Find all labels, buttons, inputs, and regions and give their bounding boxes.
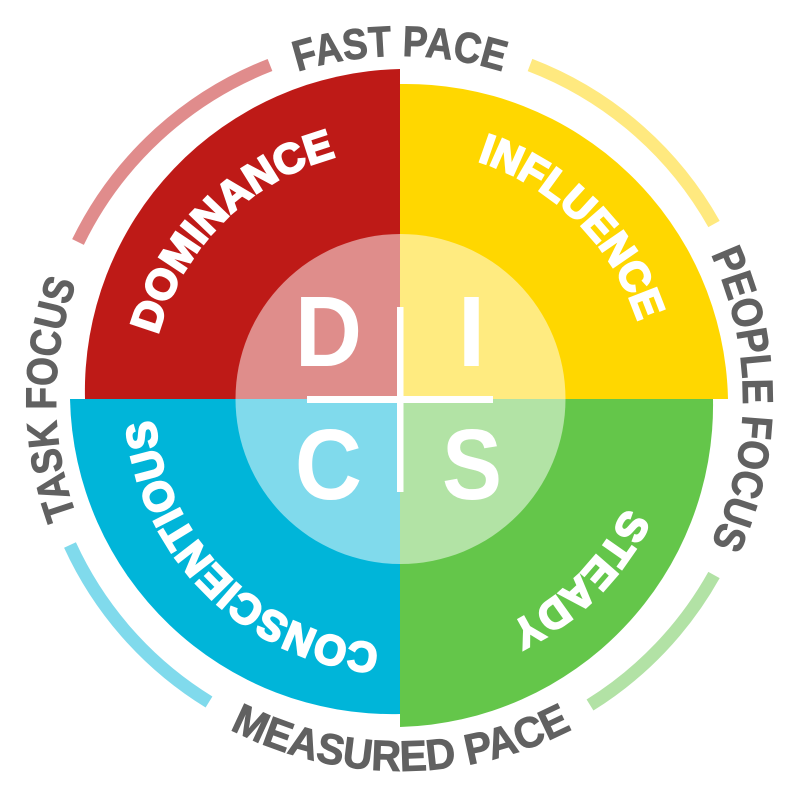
outer arc: blue [70, 545, 209, 702]
outer arc: yellow [530, 65, 714, 224]
label: influence: INFLUENCE [478, 133, 666, 322]
outer arc: red [78, 65, 270, 242]
label: steady: STEADY [517, 511, 648, 652]
letter S: S [442, 410, 502, 521]
centre cross [307, 307, 493, 492]
label: measured pace: MEASURED PACE [232, 703, 572, 772]
letter D: D [295, 277, 362, 388]
centre circle overlay [236, 234, 566, 564]
label: dominance: DOMINANCE [130, 128, 336, 334]
letter C: C [295, 410, 362, 521]
quadrant: conscientious [70, 399, 400, 714]
letter I: I [458, 276, 485, 388]
quadrant: dominance [85, 69, 400, 399]
label: task focus: TASK FOCUS [26, 276, 74, 525]
label: conscientious: CONSCIENTIOUS [126, 421, 377, 673]
quadrant: steady [400, 399, 713, 727]
quadrant: influence [400, 84, 728, 399]
label: fast pace: FAST PACE [292, 26, 508, 72]
outer arc: green [590, 575, 714, 705]
label: people focus: PEOPLE FOCUS [712, 244, 774, 552]
